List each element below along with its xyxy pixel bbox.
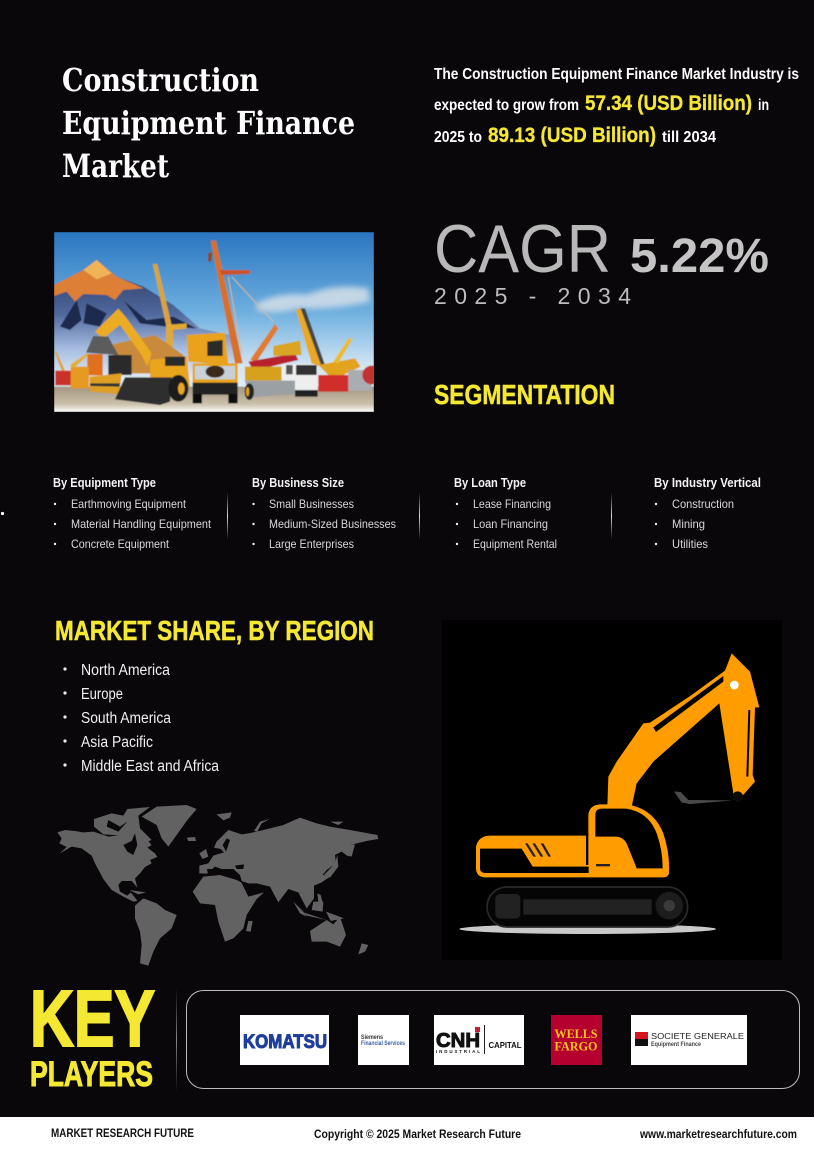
market growth summary: 2025 to <box>434 129 482 146</box>
logo: wells fargo: FARGO <box>554 1038 598 1054</box>
logo: societe generale: Equipment Finance <box>651 1041 701 1048</box>
key players heading: PLAYERS <box>30 1055 153 1094</box>
segment: by industry vertical: Construction <box>672 497 734 511</box>
segment: by loan type: By Loan Type <box>454 475 526 490</box>
title: Market <box>62 147 169 185</box>
footer bar: MARKET RESEARCH FUTURE <box>51 1126 194 1140</box>
logo: wells fargo: WELLS <box>554 1026 598 1041</box>
footer bar: Copyright © 2025 Market Research Future <box>314 1127 521 1141</box>
key players heading <box>30 974 155 1094</box>
region list: South America <box>81 710 171 727</box>
white truck and dozer blade <box>245 341 318 400</box>
segment: by loan type <box>454 475 557 551</box>
segment: by business size: Large Enterprises <box>269 537 354 551</box>
title <box>62 61 355 185</box>
region list <box>63 662 219 775</box>
segment: by loan type: Equipment Rental <box>473 537 557 551</box>
logo: cnh industrial capital: CAPITAL <box>488 1040 522 1050</box>
boom and arm <box>607 653 759 807</box>
logo: komatsu <box>240 1015 329 1065</box>
CAGR figure: 5.22% <box>630 230 769 283</box>
segment: by industry vertical: By Industry Vertical <box>654 475 761 490</box>
market growth summary: till 2034 <box>662 129 716 146</box>
photo: construction machinery <box>54 232 381 412</box>
market growth summary: 57.34 (USD Billion) <box>585 92 752 115</box>
market growth summary <box>434 66 799 147</box>
bucket <box>674 791 743 804</box>
logo: wells fargo <box>551 1015 602 1065</box>
heading: segmentation: SEGMENTATION <box>434 379 615 410</box>
segment: by business size: By Business Size <box>252 475 344 490</box>
region list: North America <box>81 662 170 679</box>
market growth summary: 89.13 (USD Billion) <box>488 124 656 147</box>
segment: by industry vertical: Utilities <box>672 537 708 551</box>
segment: by industry vertical: Mining <box>672 517 705 531</box>
segment: by equipment type: Material Handling Equipment <box>71 517 212 531</box>
segment: by equipment type: Earthmoving Equipment <box>71 497 187 511</box>
title: Construction <box>62 61 259 99</box>
world map <box>57 805 378 966</box>
segment: by business size <box>252 475 396 551</box>
CAGR figure: CAGR <box>434 211 611 287</box>
heading: market share by region: MARKET SHARE, BY REGION <box>55 615 374 646</box>
segment: by industry vertical <box>654 475 761 551</box>
crane booms <box>153 241 278 363</box>
segment: by business size: Small Businesses <box>269 497 354 511</box>
key players panel <box>186 990 800 1088</box>
logo: cnh industrial capital <box>434 1015 524 1065</box>
segment: by business size: Medium-Sized Businesses <box>269 517 396 531</box>
region list: Europe <box>81 686 123 703</box>
central crane truck <box>187 333 238 403</box>
market growth summary: expected to grow from <box>434 97 579 114</box>
logo: societe generale: SOCIETE GENERALE <box>651 1031 744 1041</box>
small vehicles left <box>55 352 89 388</box>
logo: societe generale <box>631 1015 747 1065</box>
loader and roller <box>87 354 190 405</box>
machine body <box>476 804 669 877</box>
logo: siemens financial services <box>358 1015 409 1065</box>
logo: komatsu: KOMATSU <box>243 1032 327 1053</box>
region list: Middle East and Africa <box>81 758 219 775</box>
dump truck behind <box>108 335 183 375</box>
CAGR figure <box>434 211 769 309</box>
segment: by equipment type <box>53 475 212 551</box>
CAGR figure: 2025 - 2034 <box>434 283 631 309</box>
logo: cnh industrial capital: CNH <box>436 1030 480 1052</box>
key players heading: KEY <box>30 974 155 1063</box>
shadow <box>459 924 716 934</box>
logo: cnh industrial capital: INDUSTRIAL <box>436 1049 480 1054</box>
segment: by equipment type: Concrete Equipment <box>71 537 170 551</box>
segment: by equipment type: By Equipment Type <box>53 475 156 490</box>
segment: by loan type: Loan Financing <box>473 517 548 531</box>
footer bar <box>0 1117 814 1150</box>
logo: siemens financial services: Siemens <box>361 1035 384 1041</box>
logo: siemens financial services: Financial Services <box>361 1041 406 1047</box>
region list: Asia Pacific <box>81 734 153 751</box>
segment: by loan type: Lease Financing <box>473 497 551 511</box>
stray dot <box>1 512 4 515</box>
tracks <box>487 887 688 927</box>
right side machinery <box>296 308 381 392</box>
seas and bays <box>107 820 244 878</box>
market growth summary: in <box>758 97 769 114</box>
excavator illustration <box>442 620 782 960</box>
orange excavator <box>86 309 152 367</box>
title: Equipment Finance <box>62 104 355 142</box>
